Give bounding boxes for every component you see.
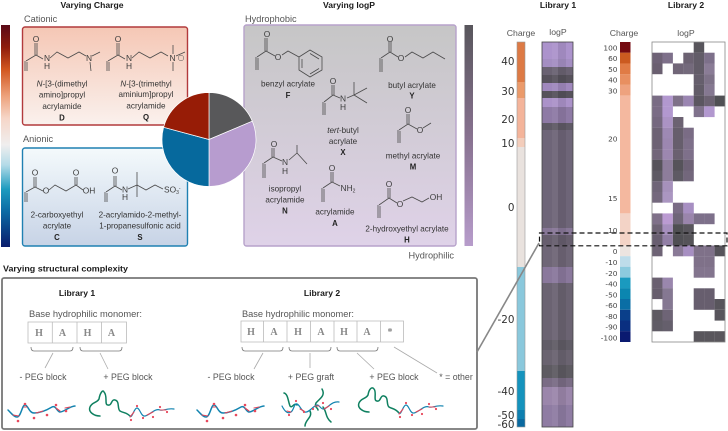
molecule C: OH (83, 186, 95, 196)
label: monomer H (365, 224, 449, 244)
axis labels: library 2 charge: 20 (608, 134, 618, 144)
label: monomer Y: Y (409, 92, 415, 100)
molecule X: O (330, 76, 337, 86)
axis labels: library 1 charge: 0 (508, 202, 514, 214)
label: monomer Q: Q (143, 113, 149, 122)
molecule N: O (271, 139, 278, 149)
panel: anionic monomers (22, 148, 188, 246)
heading: varying structural complexity: Varying structural complexity (3, 264, 128, 274)
label: monomer S: S (137, 233, 143, 242)
molecule N: H (282, 166, 288, 176)
molecule C (25, 168, 95, 202)
heading: library 2: Library 2 (668, 0, 704, 10)
axis labels: library 2 charge: 100 (603, 44, 618, 52)
sequence: library 2 monomers: H (294, 327, 302, 338)
label: monomer F: benzyl acrylate (261, 80, 315, 88)
panel: logP monomers (244, 25, 456, 246)
label: monomer D: N-[3-(dimethyl (37, 80, 88, 88)
label: base monomer, library 2: Base hydrophilic monomer: (242, 309, 354, 319)
molecule M: O (405, 105, 412, 115)
molecule H: OH (430, 192, 442, 202)
bracket: PEG block, library 2 (337, 347, 419, 382)
label: monomer D: acrylamide (42, 102, 82, 111)
label: monomer F: F (286, 91, 291, 100)
molecule Y: O (398, 53, 405, 63)
polymer: PEG block, library 2 (359, 388, 443, 418)
heading: varying charge: Varying Charge (60, 0, 124, 10)
molecule F: O (264, 29, 271, 39)
label: monomer Q: aminium]propyl (119, 90, 174, 99)
axis labels: library 1 charge: 30 (501, 86, 514, 98)
bracket: no PEG block, library 2: - PEG block (208, 372, 255, 382)
molecule C: O (43, 186, 50, 196)
label: base monomer, library 1: Base hydrophilic monomer: (29, 309, 142, 319)
molecule M: O (417, 125, 424, 135)
axis labels: library 2 charge: 15 (608, 194, 618, 203)
label: monomer A: acrylamide (315, 208, 355, 216)
molecule A: NH (341, 183, 353, 193)
label: monomer N: N (282, 206, 288, 216)
molecule D: H (44, 61, 50, 71)
connector: panel to library 1 selection (477, 243, 539, 352)
label: monomer C: C (54, 233, 60, 242)
label: monomer Q: N-[3-(trimethyl (120, 80, 172, 88)
label: monomer N: acrylamide (265, 196, 305, 204)
sequence: library 1 monomers: A (108, 328, 116, 339)
label: monomer S: 1-propanesulfonic acid (99, 222, 181, 230)
heading: library 1: Library 1 (540, 0, 576, 10)
label: monomer N: isopropyl (269, 184, 301, 194)
label: monomer X (327, 126, 359, 157)
molecule H: O (386, 179, 393, 189)
label: monomer D: amino]propyl (39, 90, 85, 100)
molecule S (105, 166, 181, 202)
dashed selection box across libraries (540, 233, 727, 246)
sequence: library 2 monomers: H (340, 327, 348, 338)
polymer: PEG block, library 1 (90, 391, 174, 421)
molecule Q: O (115, 34, 122, 44)
axis labels: library 1 charge: 10 (501, 138, 514, 150)
axis labels: library 2 charge: 40 (608, 76, 618, 84)
label: monomer S: 2-acrylamido-2-methyl- (99, 210, 182, 220)
sequence: library 1 monomers (28, 322, 126, 343)
sequence: library 1 monomers: H (84, 328, 92, 339)
axis labels: library 2 charge: 60 (608, 54, 618, 63)
molecule A: O (329, 163, 336, 173)
axis labels: library 2 charge: 0 (613, 247, 618, 256)
label: library 2 logP: logP (677, 28, 695, 38)
sequence: library 2 monomers: A (317, 327, 325, 338)
bracket: no PEG block, library 2 (208, 347, 283, 382)
molecule Q: H (126, 61, 132, 71)
sequence: library 1 monomers: H (35, 328, 43, 339)
bracket: no PEG block, library 1: - PEG block (20, 372, 67, 382)
molecule S: - (179, 186, 181, 192)
axis labels: library 2 charge: -90 (605, 322, 618, 332)
charge strip: library 1 (517, 42, 525, 427)
bracket: PEG block, library 1 (80, 347, 153, 382)
axis labels: library 1 charge: 40 (501, 56, 514, 68)
sequence: library 1 monomers: A (59, 328, 67, 339)
label: library 1 logP: logP (549, 27, 567, 37)
heatmap: library 1 logP (542, 42, 573, 427)
charge strip: library 2 (620, 42, 630, 342)
heading: library 2 design: Library 2 (304, 288, 340, 298)
molecule Q: N (126, 53, 132, 63)
label: monomer D (37, 80, 88, 122)
label: monomer Q (119, 80, 174, 122)
bracket: PEG block, library 1: + PEG block (103, 372, 153, 382)
axis labels: library 2 charge: -40 (605, 280, 618, 288)
molecule C: O (32, 168, 39, 178)
axis labels: library 1 charge: -20 (498, 314, 514, 326)
label: monomer Q: acrylamide (126, 102, 166, 110)
polymer: no PEG, library 2 (197, 403, 264, 422)
label: monomer M: M (410, 162, 416, 172)
colour scale: logP (464, 25, 473, 246)
molecule M (398, 105, 431, 143)
axis labels: library 2 charge: -10 (605, 258, 618, 267)
molecule X: N (340, 94, 346, 104)
colour scale: charge (1, 25, 10, 247)
axis labels: library 1 charge: -40 (498, 386, 514, 398)
label: anionic: Anionic (23, 134, 54, 144)
molecule X: H (340, 102, 346, 112)
label: monomer D: D (59, 114, 65, 122)
sequence: library 2 monomers: * (388, 327, 392, 338)
polymer: no PEG, library 1 (8, 403, 75, 422)
molecule D (25, 34, 100, 71)
axis labels: library 2 charge: 50 (608, 65, 618, 74)
molecule S: 3 (176, 190, 179, 196)
label: monomer C: acrylate (43, 222, 72, 230)
label: cationic: Cationic (24, 14, 58, 24)
annotation: other monomer: * = other (439, 372, 473, 382)
heading: varying logP: Varying logP (323, 0, 375, 10)
label: hydrophilic: Hydrophilic (409, 250, 454, 260)
label: monomer C (31, 210, 84, 242)
molecule A: 2 (353, 188, 356, 194)
bracket: PEG block, library 2: + PEG block (369, 372, 419, 382)
axis labels: library 2 charge: 10 (608, 226, 618, 235)
axis labels: library 2 charge: 30 (608, 86, 618, 96)
axis labels: library 2 charge: -80 (605, 312, 618, 321)
molecule D: N (44, 53, 50, 63)
label: library 1 charge: Charge (507, 28, 535, 38)
molecule F: O (275, 52, 282, 62)
bracket: no PEG block, library 1 (20, 347, 73, 382)
molecule F (256, 29, 322, 77)
sequence: library 2 monomers: A (363, 327, 371, 338)
axis labels: library 2 charge (601, 44, 618, 342)
molecule D: N (86, 53, 92, 63)
bracket: PEG graft, library 2 (288, 347, 335, 382)
label: monomer A: A (332, 219, 338, 228)
label: monomer Y: butyl acrylate (388, 81, 436, 90)
molecule H (378, 179, 442, 218)
molecule S: H (122, 192, 128, 202)
label: monomer X: tert-butyl (327, 126, 359, 135)
molecule Y (380, 34, 445, 72)
molecule Y: O (387, 34, 394, 44)
molecule D: O (33, 34, 40, 44)
molecule H: O (397, 199, 404, 209)
panel: structural complexity (2, 278, 477, 429)
bracket: PEG graft, library 2: + PEG graft (288, 372, 335, 382)
label: monomer M (386, 152, 441, 172)
axis labels: library 2 charge: -100 (601, 334, 618, 342)
axis labels: library 1 charge (498, 56, 514, 431)
molecule X (323, 76, 367, 115)
polymer: PEG graft (282, 389, 339, 426)
axis labels: library 1 charge: -50 (498, 410, 514, 422)
pie chart: monomer composition (162, 92, 256, 186)
sequence: library 2 monomers (241, 321, 404, 342)
label: monomer X: X (340, 148, 346, 157)
label: monomer S (99, 210, 182, 242)
molecule A (322, 163, 356, 202)
label: monomer H: 2-hydroxyethyl acrylate (365, 224, 449, 234)
axis labels: library 1 charge: 20 (501, 114, 514, 126)
label: monomer C: 2-carboxyethyl (31, 210, 84, 220)
sequence: library 2 monomers: H (247, 327, 255, 338)
label: monomer X: acrylate (329, 137, 358, 146)
axis labels: library 2 charge: -60 (605, 301, 618, 310)
axis labels: library 1 charge: -60 (498, 419, 514, 431)
label: monomer F (261, 80, 315, 100)
molecule S: O (112, 166, 119, 176)
molecule Q (107, 34, 185, 71)
heading: library 1 design: Library 1 (59, 288, 95, 298)
molecule S: N (122, 184, 128, 194)
label: monomer A (315, 208, 355, 228)
molecule S: SO (164, 184, 176, 194)
label: monomer H: H (404, 236, 410, 244)
molecule C: O (73, 168, 80, 178)
annotation: other monomer (394, 347, 473, 382)
sequence: library 2 monomers: A (270, 327, 278, 338)
molecule N: N (282, 157, 288, 167)
axis labels: library 2 charge: -20 (605, 269, 618, 278)
molecule N (263, 139, 307, 178)
label: monomer Y (388, 81, 436, 100)
label: library 2 charge: Charge (610, 28, 638, 38)
label: monomer M: methyl acrylate (386, 152, 441, 160)
heatmap: library 2 logP (652, 42, 725, 342)
panel: cationic monomers (22, 27, 188, 125)
label: monomer N (265, 184, 305, 216)
label: hydrophobic: Hydrophobic (245, 14, 297, 24)
molecule Q: N (169, 53, 176, 63)
axis labels: library 2 charge: -50 (605, 290, 618, 300)
